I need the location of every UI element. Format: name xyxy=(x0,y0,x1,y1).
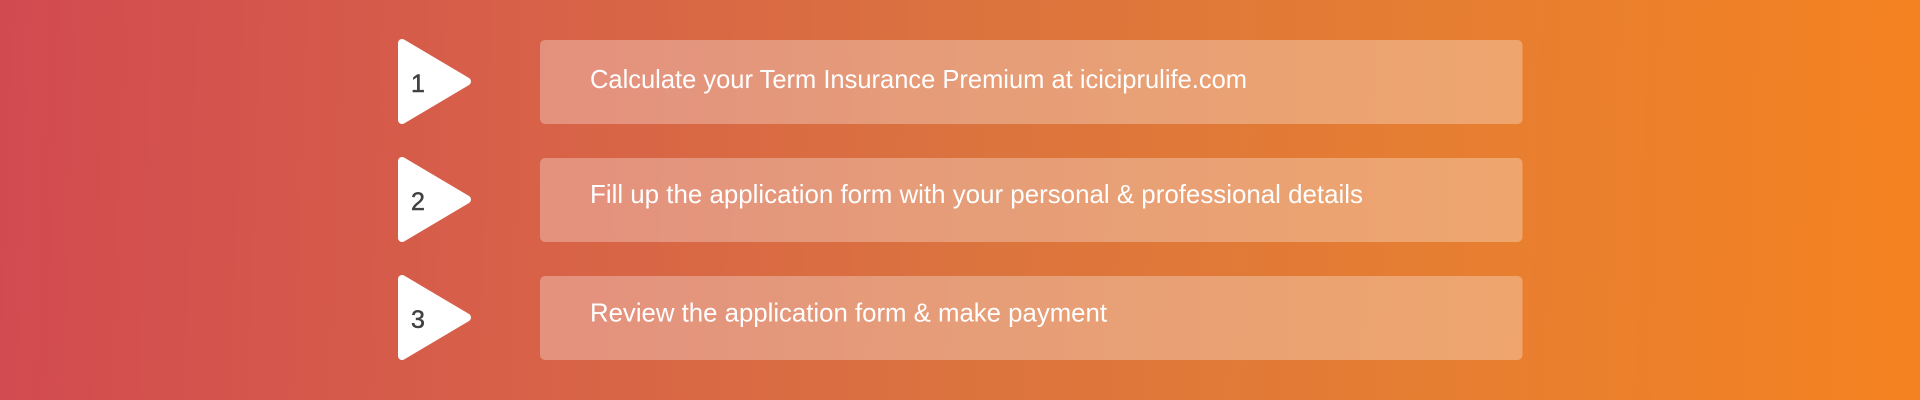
step 2 panel xyxy=(540,158,1522,242)
step 2 number: 2 xyxy=(411,188,425,216)
icon: step 3 triangle xyxy=(402,279,467,356)
step 2 text: Fill up the application form with your personal & professional details xyxy=(590,179,1363,209)
step 1 text: Calculate your Term Insurance Premium at iciciprulife.com xyxy=(590,64,1247,94)
step 2 xyxy=(402,158,1522,242)
step 3 number: 3 xyxy=(411,306,425,334)
step 1 xyxy=(402,40,1522,124)
step 3 xyxy=(402,276,1522,360)
icon: step 1 triangle xyxy=(402,43,467,120)
step 3 text: Review the application form & make payment xyxy=(590,298,1108,328)
icon: step 2 triangle xyxy=(402,161,467,238)
step 3 panel xyxy=(540,276,1522,360)
step 1 panel xyxy=(540,40,1522,124)
step 1 number: 1 xyxy=(411,70,425,98)
